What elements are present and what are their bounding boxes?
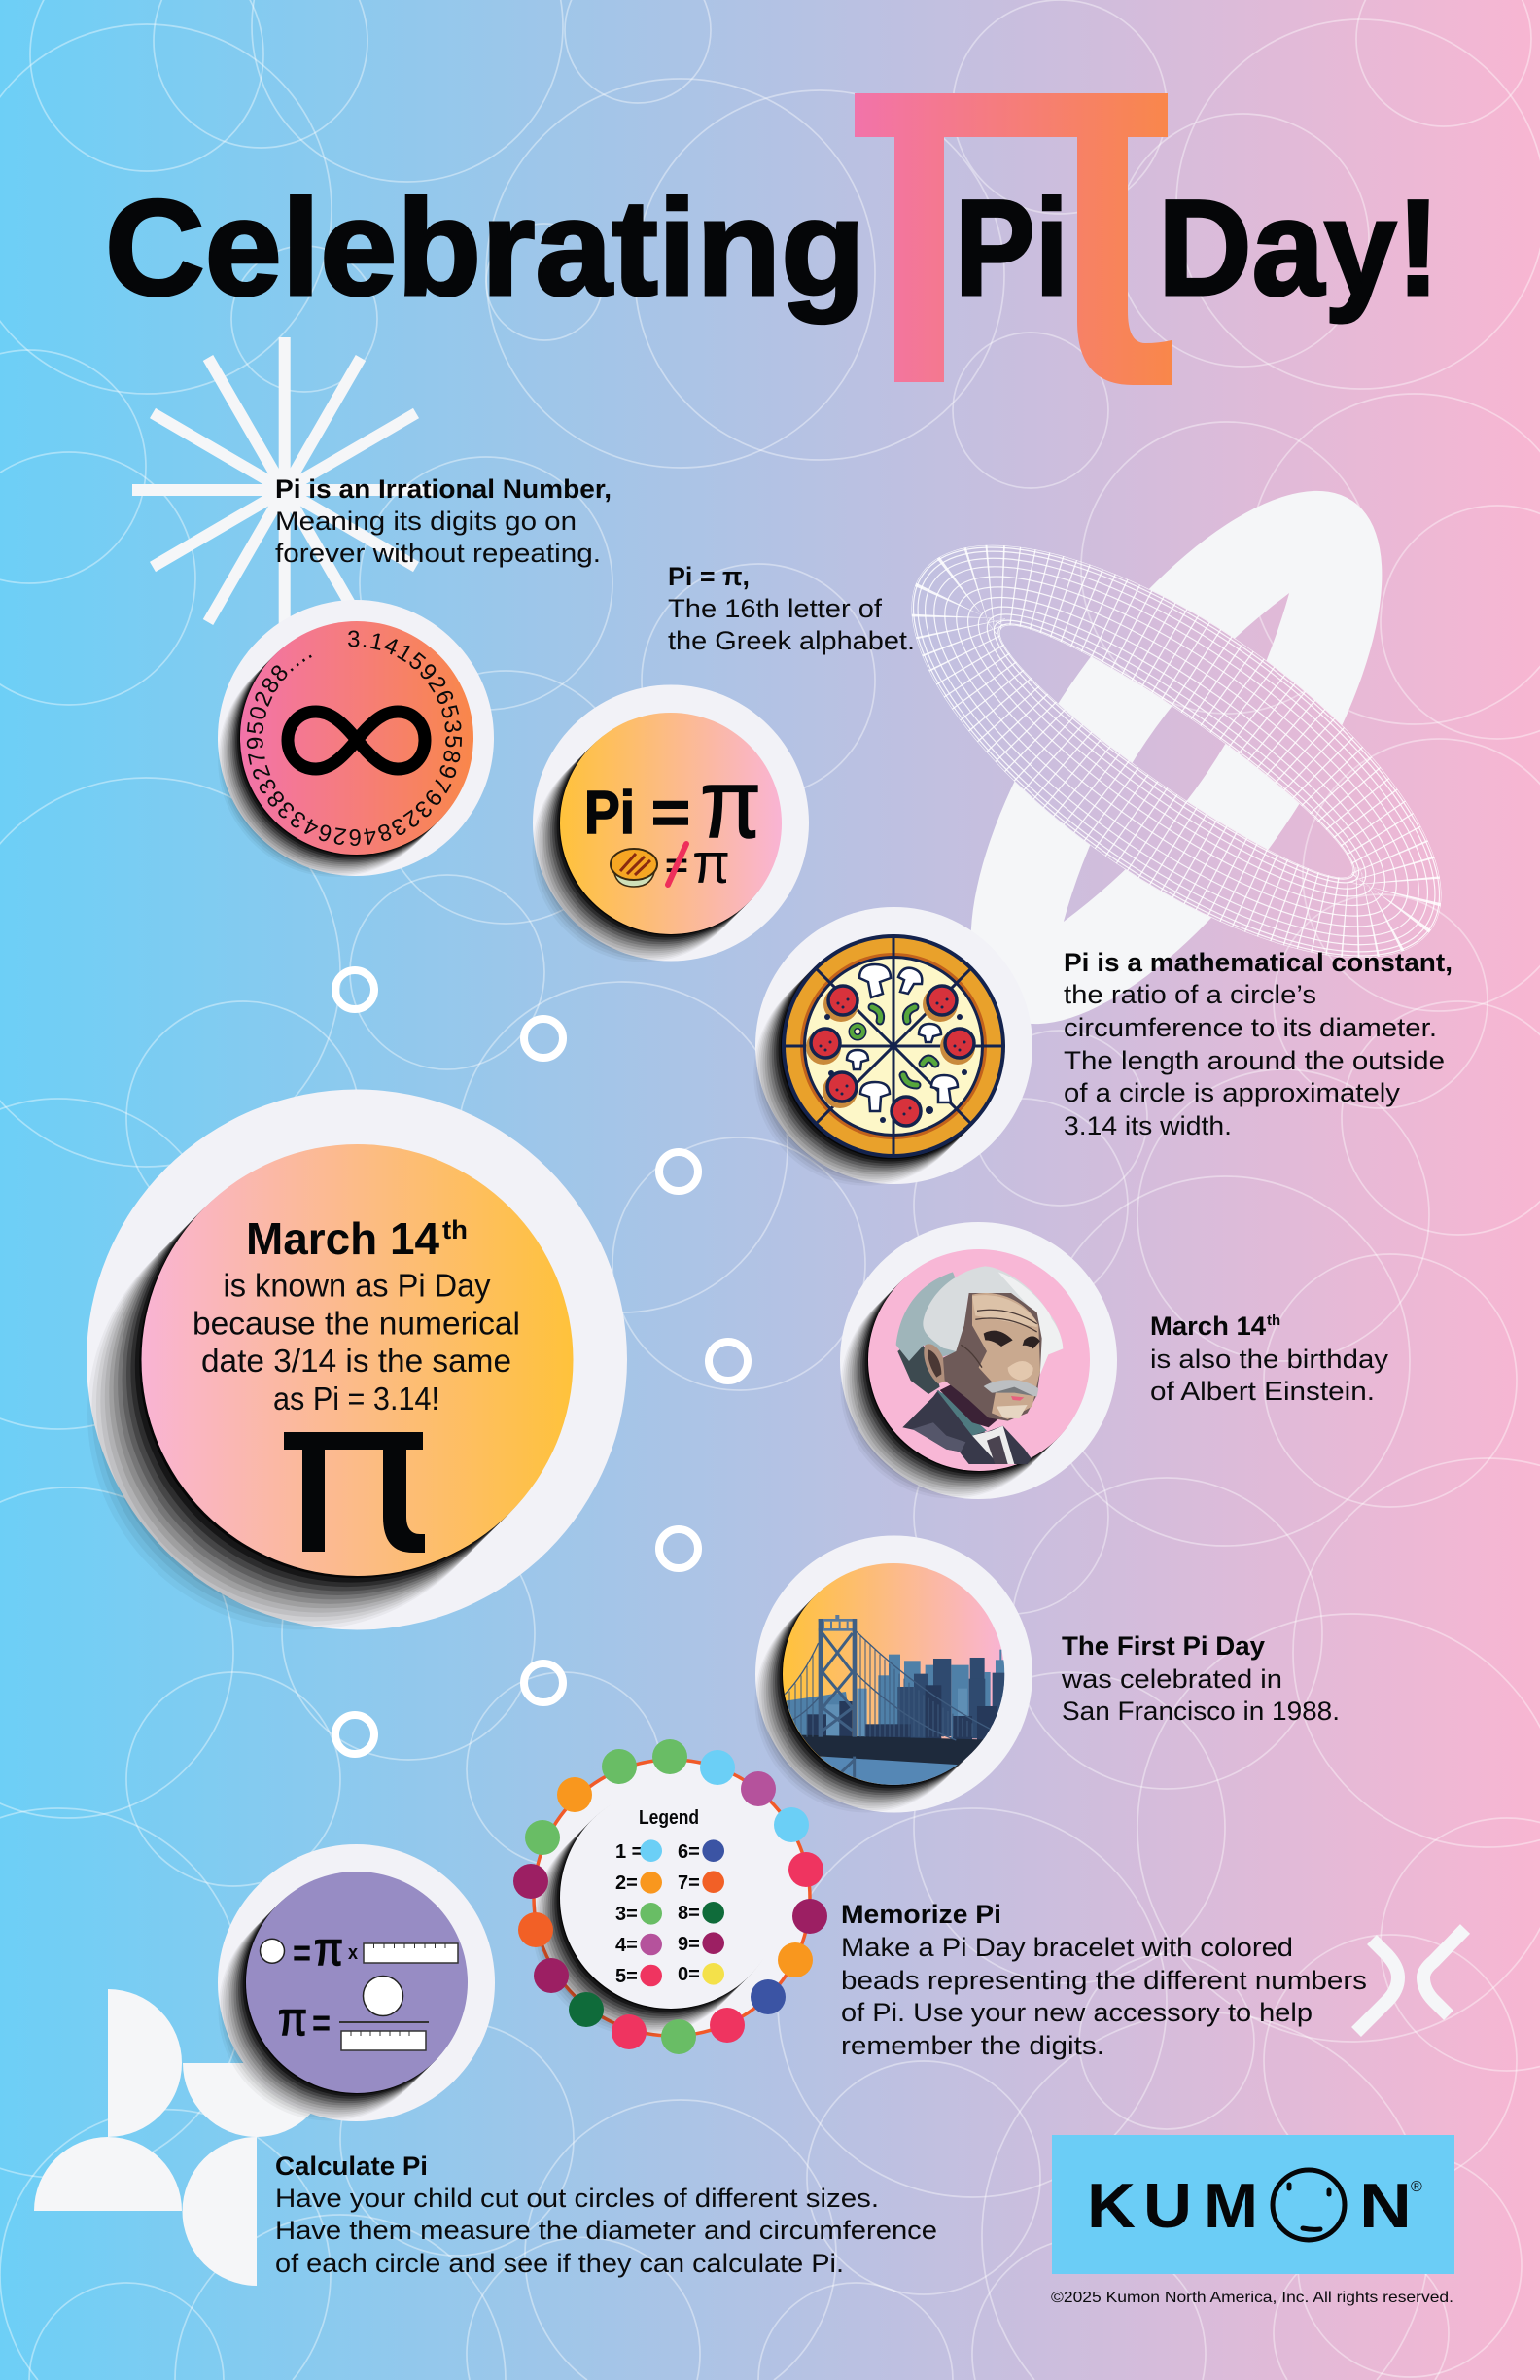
large circle: March 14: March 14 bbox=[246, 1213, 439, 1264]
circle: calculate formula: = bbox=[312, 2002, 331, 2045]
title: Pi bbox=[955, 171, 1068, 324]
large circle: March 14 bbox=[87, 1089, 627, 1629]
legend: 4= bbox=[615, 1935, 638, 1956]
text: irrational number: Pi is an Irrational Number, bbox=[275, 474, 612, 504]
text: Pi = pi: Pi = π, bbox=[668, 562, 750, 591]
legend: 6= bbox=[678, 1841, 700, 1863]
circle: calculate formula: x bbox=[348, 1942, 358, 1964]
Kumon logo bbox=[1052, 2135, 1454, 2274]
text: first Pi Day: was celebrated in bbox=[1061, 1664, 1282, 1694]
text: irrational number bbox=[275, 474, 612, 568]
text: irrational number: Meaning its digits go on bbox=[275, 507, 577, 536]
Kumon logo: M bbox=[1204, 2170, 1258, 2241]
large circle: March 14: th bbox=[442, 1215, 468, 1244]
text: Pi = pi bbox=[668, 562, 915, 655]
circle: irrational number bbox=[218, 600, 494, 877]
large circle: March 14: because the numerical bbox=[192, 1305, 520, 1342]
circle: Pi equals pi: = bbox=[665, 845, 688, 885]
text: mathematical constant bbox=[1064, 948, 1452, 1140]
large circle: March 14: date 3/14 is the same bbox=[201, 1343, 511, 1379]
text: mathematical constant: Pi is a mathematical constant, bbox=[1064, 948, 1452, 977]
icon: pi symbol bbox=[284, 1432, 425, 1553]
icon: Kumon face bbox=[1273, 2170, 1345, 2240]
circle: Pi equals pi: = bbox=[651, 780, 690, 847]
text: memorize Pi: remember the digits. bbox=[841, 2031, 1104, 2060]
circle: San Francisco bridge bbox=[754, 1536, 1032, 1812]
text: memorize Pi bbox=[841, 1900, 1367, 2060]
legend: 0= bbox=[678, 1964, 700, 1985]
circle: calculate formula: π bbox=[314, 1924, 343, 1976]
legend: 2= bbox=[615, 1872, 638, 1894]
text: mathematical constant: circumference to its diameter. bbox=[1064, 1013, 1437, 1042]
text: mathematical constant: The length around the outside bbox=[1064, 1046, 1445, 1075]
text: Einstein birthday: of Albert Einstein. bbox=[1150, 1377, 1375, 1406]
circle: Pi equals pi: Pi bbox=[584, 780, 635, 847]
text: Pi = pi: The 16th letter of bbox=[668, 594, 883, 623]
icon: ruler bbox=[364, 1943, 458, 1963]
text: mathematical constant: the ratio of a circle’s bbox=[1064, 980, 1316, 1009]
text: Einstein birthday bbox=[1150, 1312, 1389, 1406]
title: Day! bbox=[1158, 171, 1440, 324]
Kumon logo: N bbox=[1359, 2170, 1412, 2241]
legend bbox=[615, 1807, 724, 1987]
small ring bubbles bbox=[335, 970, 748, 1754]
white swoosh ring behind torus bbox=[970, 490, 1382, 1025]
text: memorize Pi: beads representing the different numbers bbox=[841, 1966, 1367, 1995]
text: first Pi Day bbox=[1061, 1631, 1340, 1726]
text: calculate Pi: Have your child cut out circles of different sizes. bbox=[275, 2184, 879, 2213]
text: mathematical constant: 3.14 its width. bbox=[1064, 1111, 1232, 1140]
title: Celebrating bbox=[105, 171, 865, 324]
text: calculate Pi: Calculate Pi bbox=[275, 2152, 428, 2181]
legend: 3= bbox=[615, 1904, 638, 1925]
icon: infinity bbox=[288, 712, 425, 769]
text: irrational number: forever without repeating. bbox=[275, 539, 601, 568]
decorative bracket shapes bbox=[1356, 1929, 1465, 2032]
circle: calculate formula: = bbox=[293, 1932, 311, 1975]
legend: 1 = bbox=[615, 1841, 643, 1863]
text: calculate Pi bbox=[275, 2152, 937, 2278]
icon: pizza bbox=[782, 934, 1005, 1158]
icon: pie bbox=[611, 849, 657, 887]
large circle: March 14: is known as Pi Day bbox=[224, 1268, 491, 1303]
legend: 5= bbox=[615, 1966, 638, 1987]
bead bracelet with legend bbox=[513, 1739, 827, 2054]
wireframe torus bbox=[912, 544, 1441, 959]
legend: Legend bbox=[639, 1807, 699, 1829]
icon: ruler bbox=[341, 2031, 426, 2050]
text: memorize Pi: of Pi. Use your new accessory to help bbox=[841, 1998, 1312, 2027]
text: first Pi Day: San Francisco in 1988. bbox=[1062, 1697, 1340, 1726]
Kumon logo: ® bbox=[1411, 2179, 1422, 2195]
title bbox=[105, 171, 1440, 324]
text: calculate Pi: of each circle and see if they can calculate Pi. bbox=[275, 2249, 844, 2278]
legend: 9= bbox=[678, 1934, 700, 1955]
digits of pi around circle: 3.14159265358979323846264338327950288.... bbox=[247, 630, 463, 846]
text: Pi = pi: the Greek alphabet. bbox=[668, 626, 915, 655]
circle: pizza bbox=[753, 907, 1032, 1186]
text: memorize Pi: Make a Pi Day bracelet with colored bbox=[841, 1933, 1293, 1962]
circle: Einstein bbox=[840, 1222, 1117, 1499]
large circle: March 14: as Pi = 3.14! bbox=[273, 1381, 439, 1417]
Kumon logo: K bbox=[1087, 2170, 1136, 2241]
text: Einstein birthday: March 14 bbox=[1150, 1312, 1266, 1341]
text: Einstein birthday: is also the birthday bbox=[1150, 1345, 1389, 1374]
text: memorize Pi: Memorize Pi bbox=[841, 1900, 1001, 1929]
circle: calculate formula: π bbox=[278, 1994, 307, 2046]
decorative semicircles bbox=[34, 1989, 331, 2286]
starburst bbox=[132, 337, 437, 643]
circle: Pi equals pi: π bbox=[700, 750, 761, 858]
text: calculate Pi: Have them measure the diameter and circumference bbox=[275, 2216, 937, 2245]
text: mathematical constant: of a circle is approximately bbox=[1064, 1078, 1401, 1107]
big pi symbol in title bbox=[855, 93, 1172, 385]
copyright: ©2025 Kumon North America, Inc. All rights reserved. bbox=[1051, 2290, 1453, 2306]
Kumon logo: U bbox=[1143, 2170, 1192, 2241]
legend: 7= bbox=[678, 1872, 700, 1894]
icon: Einstein portrait bbox=[896, 1266, 1063, 1464]
beads bbox=[513, 1739, 827, 2054]
legend: 8= bbox=[678, 1903, 700, 1924]
text: first Pi Day: The First Pi Day bbox=[1062, 1631, 1265, 1661]
circle: calculate formula bbox=[218, 1844, 495, 2121]
icon: bridge and skyline bbox=[778, 1615, 1008, 1789]
circle: Pi equals pi: π bbox=[692, 832, 730, 895]
text: Einstein birthday: th bbox=[1267, 1312, 1280, 1329]
circle: Pi equals pi bbox=[533, 684, 809, 962]
